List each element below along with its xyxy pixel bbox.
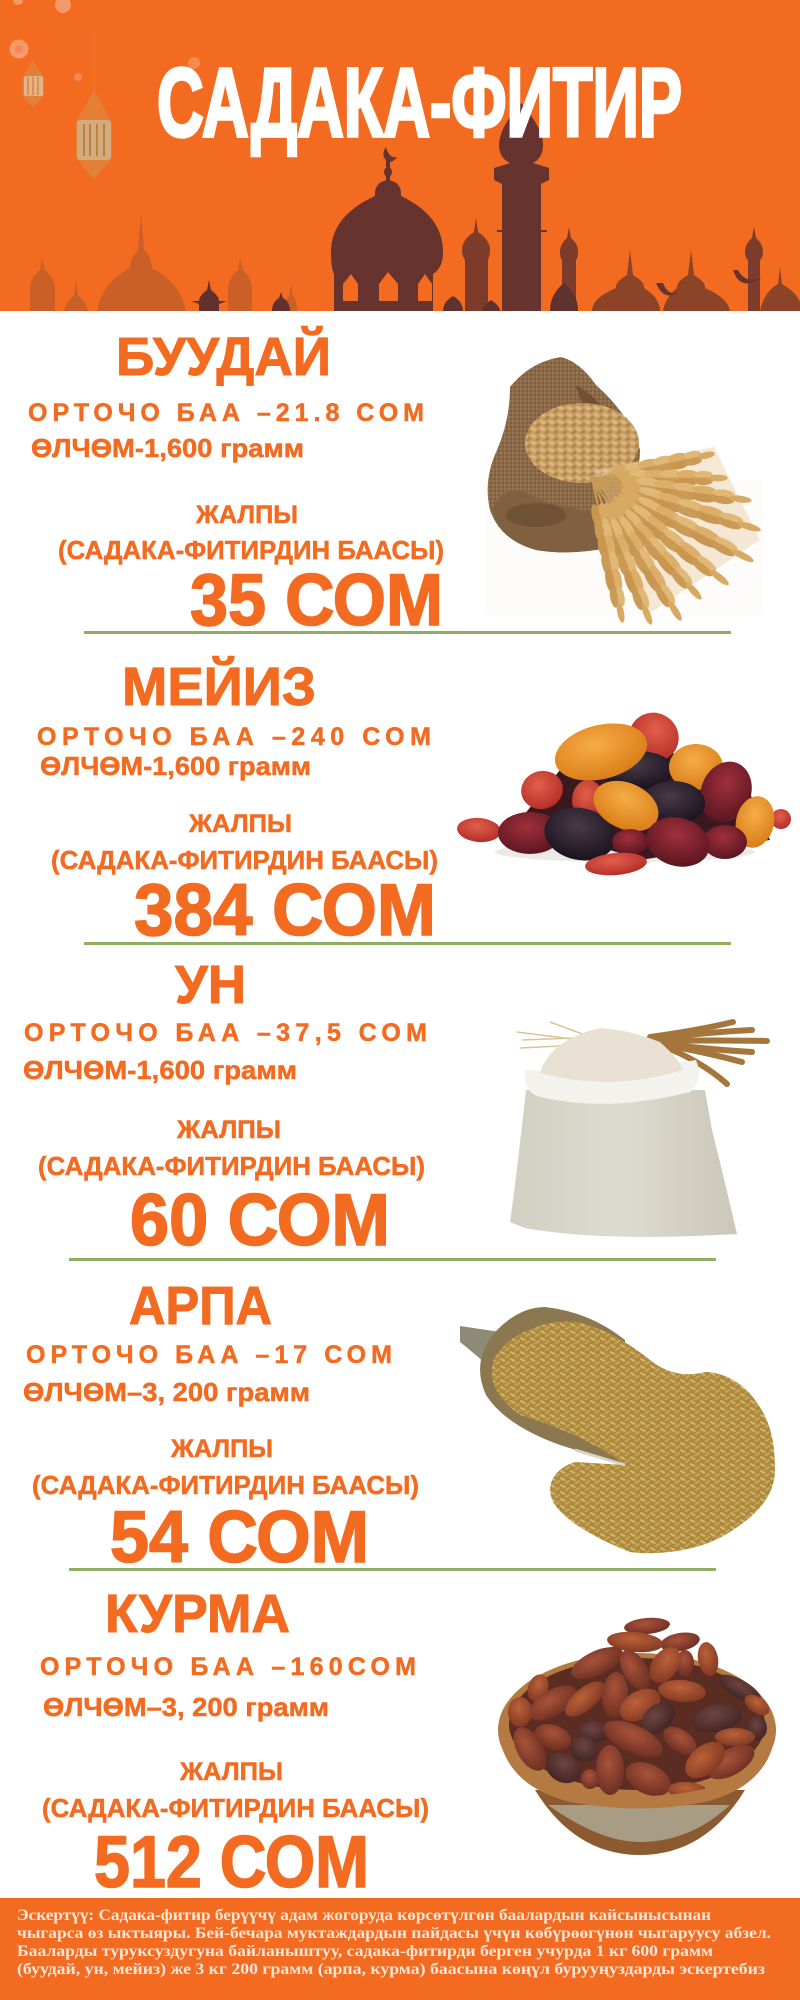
image: basket of dates xyxy=(498,1616,776,1855)
hanging lanterns and ornaments xyxy=(10,0,200,180)
minaret tower xyxy=(494,103,549,311)
section: barley xyxy=(23,1276,419,1578)
divider xyxy=(84,942,731,945)
section: dates xyxy=(40,1584,429,1903)
total sublabel: wheat: (САДАКА-ФИТИРДИН БААСЫ) xyxy=(58,535,444,565)
total price: barley: 54 СОМ xyxy=(110,1497,369,1578)
total label: barley: ЖАЛПЫ xyxy=(170,1435,273,1463)
footer note text: Бааларды туруксуздугуна байланыштуу, садака-фитирди берген учурда 1 кг 600 грамм xyxy=(17,1943,713,1960)
header banner xyxy=(0,0,800,311)
section: wheat xyxy=(28,326,444,641)
footer note text: Эскертүү: Садака-фитир берүүчү адам жогоруда көрсөтүлгөн баалардын кайсынысынан xyxy=(17,1907,711,1924)
total price: raisins: 384 СОМ xyxy=(134,870,436,951)
heading: dates: КУРМА xyxy=(105,1584,290,1644)
heading: wheat: БУУДАЙ xyxy=(116,326,331,387)
heading: raisins: МЕЙИЗ xyxy=(122,656,316,717)
image: sack of flour xyxy=(510,1022,767,1237)
right skyline domes and crescents xyxy=(592,227,800,311)
footer note text: (буудай, ун, мейиз) же 3 кг 200 грамм (арпа, курма) баасына көңүл бурууңуздарды эскертебиз xyxy=(17,1961,766,1978)
measure: barley: ӨЛЧӨМ–3, 200 грамм xyxy=(23,1377,310,1407)
average price: barley: ОРТОЧО БАА –17 СОМ xyxy=(26,1341,392,1369)
total sublabel: barley: (САДАКА-ФИТИРДИН БААСЫ) xyxy=(32,1470,419,1500)
total label: dates: ЖАЛПЫ xyxy=(179,1758,283,1786)
image: scoop of barley xyxy=(460,1307,775,1553)
measure: raisins: ӨЛЧӨМ-1,600 грамм xyxy=(40,751,311,781)
section: flour xyxy=(23,955,427,1261)
total sublabel: flour: (САДАКА-ФИТИРДИН БААСЫ) xyxy=(38,1151,425,1181)
image: sack of wheat xyxy=(485,357,763,628)
divider xyxy=(84,631,731,634)
side towers xyxy=(462,218,578,311)
total price: wheat: 35 СОМ xyxy=(190,560,443,641)
divider xyxy=(69,1568,716,1571)
average price: raisins: ОРТОЧО БАА –240 СОМ xyxy=(37,723,431,751)
total sublabel: raisins: (САДАКА-ФИТИРДИН БААСЫ) xyxy=(51,845,438,875)
total label: wheat: ЖАЛПЫ xyxy=(195,501,298,529)
total label: raisins: ЖАЛПЫ xyxy=(188,810,292,838)
footer note panel xyxy=(0,1898,800,2000)
section: raisins xyxy=(37,656,438,951)
total price: flour: 60 СОМ xyxy=(130,1180,390,1261)
measure: wheat: ӨЛЧӨМ-1,600 грамм xyxy=(31,433,304,463)
divider xyxy=(69,1258,716,1261)
average price: dates: ОРТОЧО БАА –160СОМ xyxy=(40,1653,416,1681)
footer note text: чыгарса өз ыктыяры. Бей-бечара муктаждардын пайдасы үчүн көбүрөөгүнөн чыгаруусу абзел. xyxy=(17,1925,771,1942)
dark foreground mosque dome xyxy=(331,147,443,311)
total label: flour: ЖАЛПЫ xyxy=(176,1116,281,1144)
faded background mosque silhouette xyxy=(30,213,297,311)
footer note text xyxy=(17,1907,771,1978)
small dark domes xyxy=(191,280,578,311)
image: dried fruit pile xyxy=(456,703,791,878)
heading: flour: УН xyxy=(175,955,246,1015)
heading: barley: АРПА xyxy=(129,1276,272,1336)
mosque arches xyxy=(343,272,432,301)
total price: dates: 512 СОМ xyxy=(94,1822,369,1903)
measure: dates: ӨЛЧӨМ–3, 200 грамм xyxy=(43,1692,329,1722)
measure: flour: ӨЛЧӨМ-1,600 грамм xyxy=(23,1055,297,1085)
total sublabel: dates: (САДАКА-ФИТИРДИН БААСЫ) xyxy=(42,1793,429,1823)
average price: wheat: ОРТОЧО БАА –21.8 СОМ xyxy=(28,399,424,427)
average price: flour: ОРТОЧО БАА –37,5 СОМ xyxy=(24,1019,427,1047)
